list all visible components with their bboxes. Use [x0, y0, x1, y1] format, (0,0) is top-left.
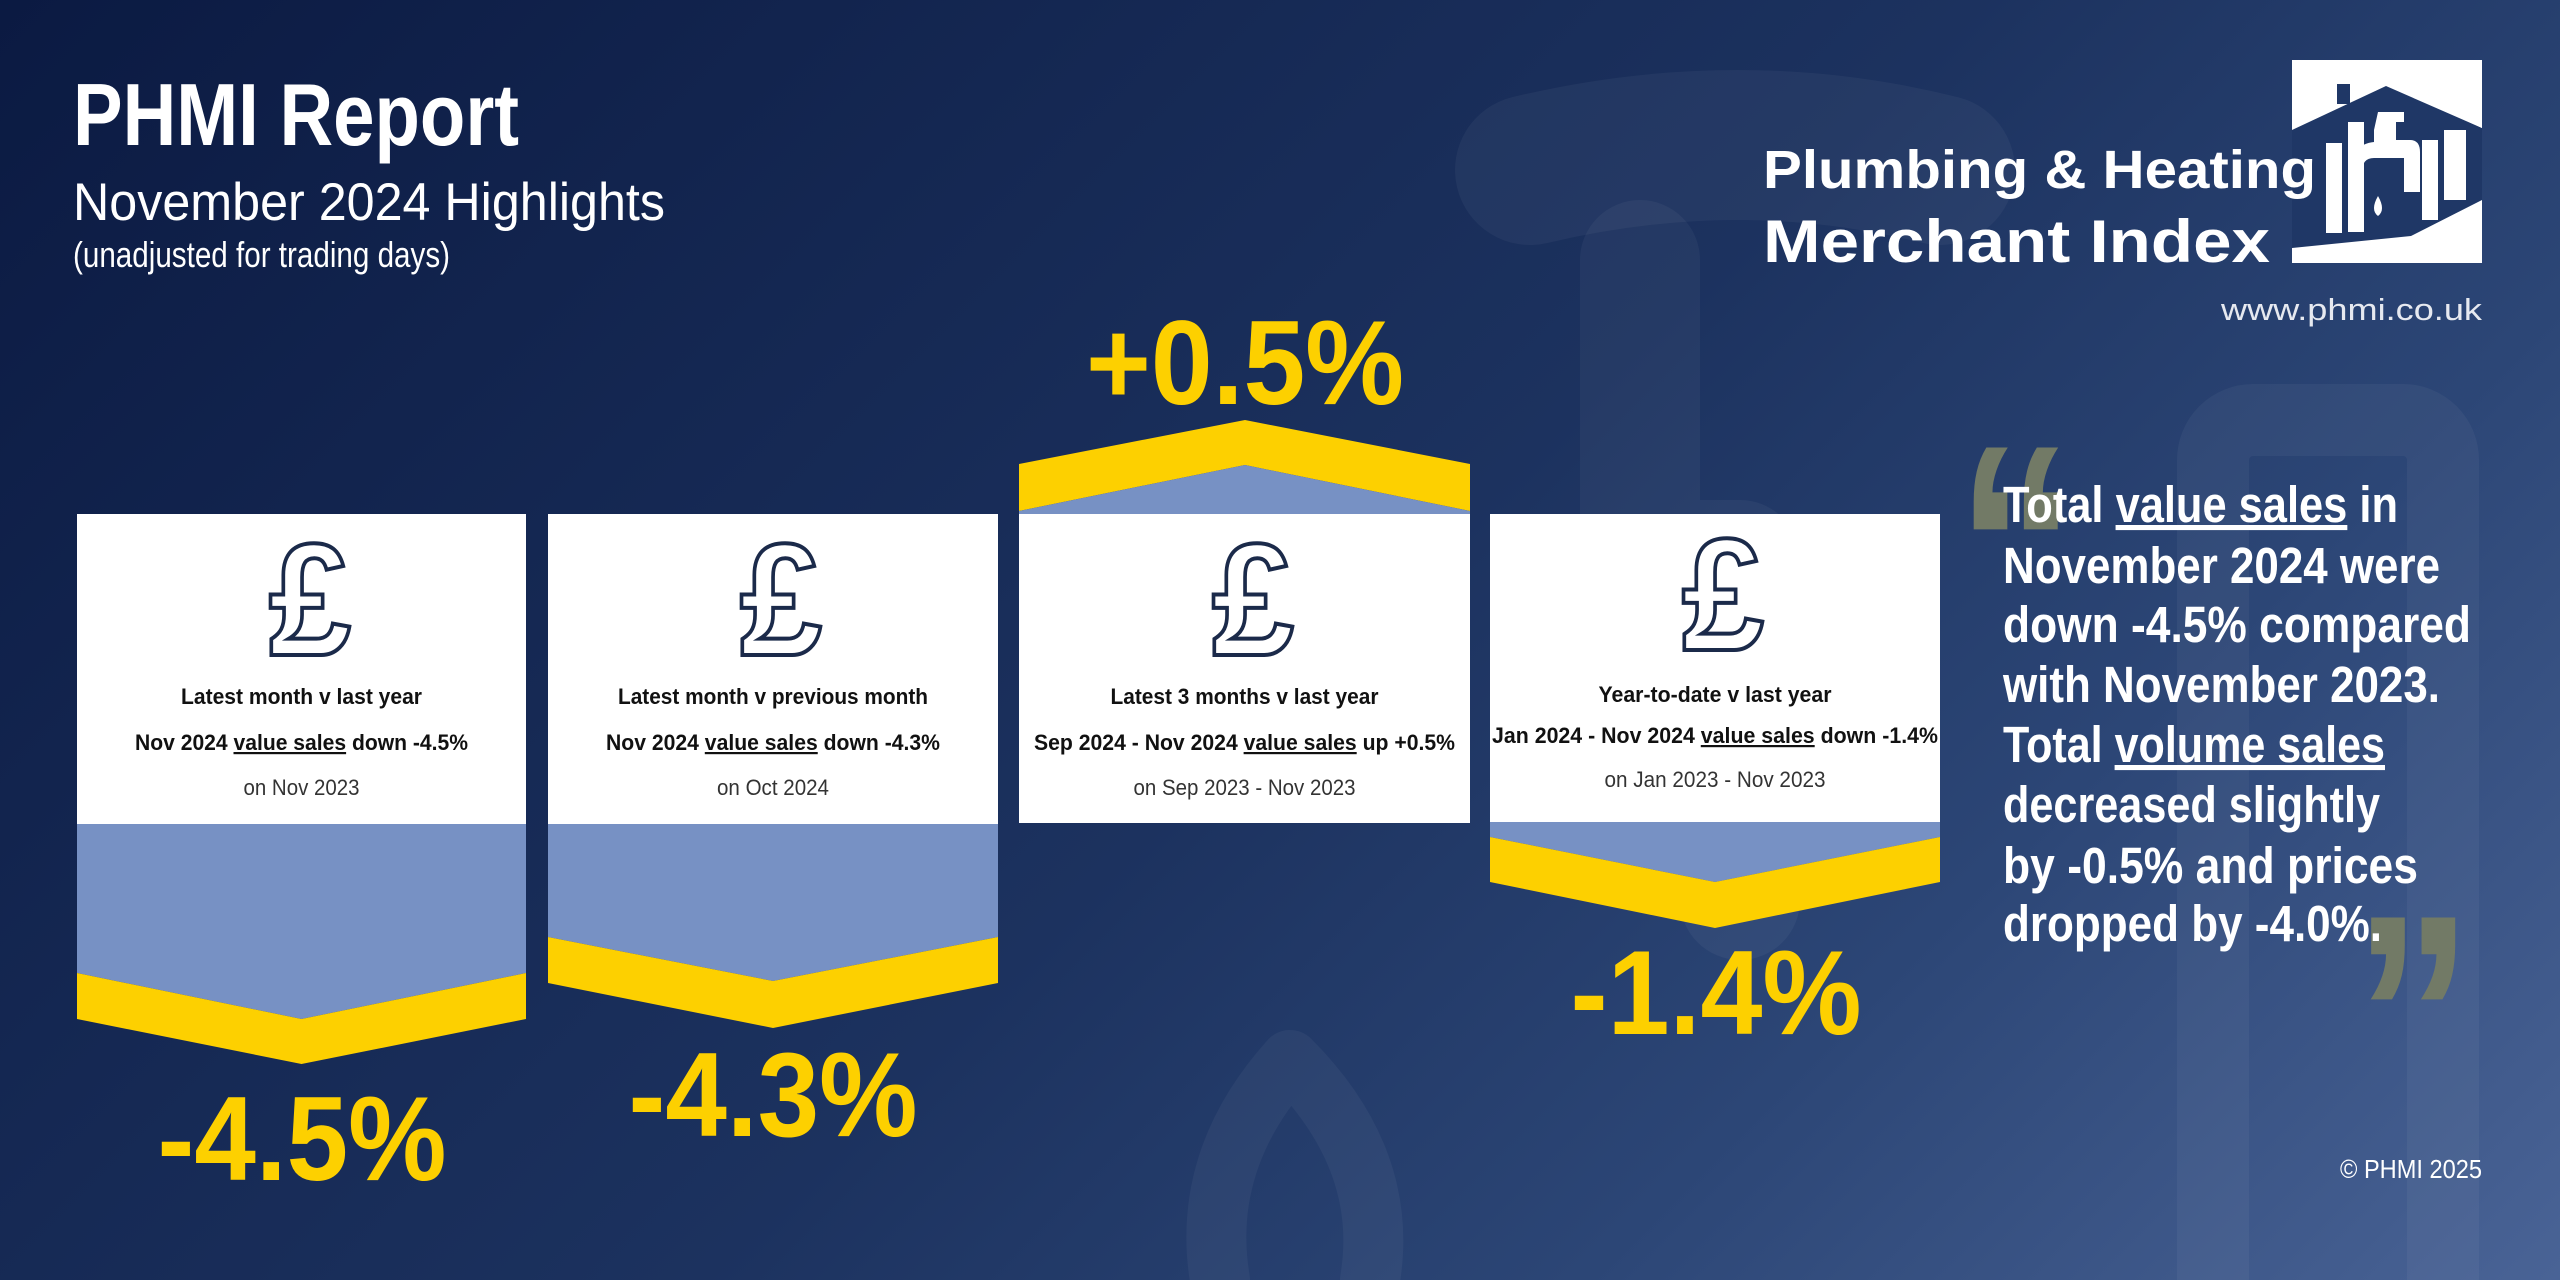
big numbers	[158, 296, 1862, 1206]
icon: pound: £	[740, 510, 822, 689]
subtitle: November 2024 Highlights	[73, 173, 665, 232]
panel: card 2 latest month v previous month: Nov 2024 value sales down -4.3%	[606, 730, 940, 755]
panel: card 1 latest month v last year: Nov 2024 value sales down -4.5%	[135, 730, 468, 755]
panel: card 1 latest month v last year: Latest month v last year	[181, 684, 422, 709]
callout: summary text: Total value sales in	[2003, 476, 2398, 533]
quote marks	[1956, 385, 2473, 1179]
callout: summary text: Total volume sales	[2003, 716, 2385, 773]
url: www.phmi.co.uk	[2220, 292, 2483, 327]
icon: pound: £	[269, 510, 351, 689]
quote marks: ”	[2353, 855, 2473, 1179]
callout: summary text: dropped by -4.0%.	[2003, 895, 2382, 952]
icon: pound: £	[1682, 505, 1764, 684]
big numbers: +0.5%	[1086, 296, 1404, 430]
big numbers: -4.5%	[158, 1072, 446, 1206]
callout: summary text: down -4.5% compared	[2003, 596, 2471, 653]
icon: logo house tap	[2292, 60, 2482, 263]
panel: card 2 latest month v previous month: Latest month v previous month	[618, 684, 928, 709]
icon: pound: £	[1212, 510, 1294, 689]
panel: card 1 latest month v last year: on Nov 2023	[244, 775, 360, 800]
logo	[1763, 60, 2483, 327]
callout: summary text: November 2024 were	[2003, 537, 2440, 594]
quote marks: “	[1956, 385, 2076, 709]
big numbers: -4.3%	[628, 1028, 918, 1162]
panel: card 3 latest 3 months v last year: Sep 2024 - Nov 2024 value sales up +0.5%	[1034, 730, 1455, 755]
panel: card 1 latest month v last year	[77, 510, 526, 1064]
big numbers: -1.4%	[1570, 926, 1862, 1060]
panel: card 4 year-to-date v last year: on Jan 2023 - Nov 2023	[1604, 767, 1826, 792]
logo: Plumbing & Heating	[1763, 140, 2316, 200]
panel: card 4 year-to-date v last year: Year-to-date v last year	[1598, 682, 1832, 707]
callout: summary text: with November 2023.	[2002, 656, 2440, 713]
title	[73, 65, 665, 275]
callout: summary text	[2002, 476, 2471, 952]
title: PHMI Report	[73, 65, 519, 164]
panel: card 2 latest month v previous month	[548, 510, 998, 1028]
panel: card 4 year-to-date v last year	[1490, 505, 1940, 928]
callout: summary text: decreased slightly	[2003, 776, 2381, 833]
panel: card 3 latest 3 months v last year	[1019, 420, 1470, 823]
logo: Merchant Index	[1763, 208, 2270, 275]
panel: card 4 year-to-date v last year: Jan 2024 - Nov 2024 value sales down -1.4%	[1492, 723, 1938, 748]
callout: summary text: by -0.5% and prices	[2003, 837, 2418, 894]
panel: card 3 latest 3 months v last year: Latest 3 months v last year	[1110, 684, 1379, 709]
copyright: © PHMI 2025	[2340, 1154, 2482, 1184]
panel: card 2 latest month v previous month: on Oct 2024	[717, 775, 829, 800]
note: (unadjusted for trading days)	[73, 234, 450, 275]
panel: card 3 latest 3 months v last year: on Sep 2023 - Nov 2023	[1134, 775, 1356, 800]
